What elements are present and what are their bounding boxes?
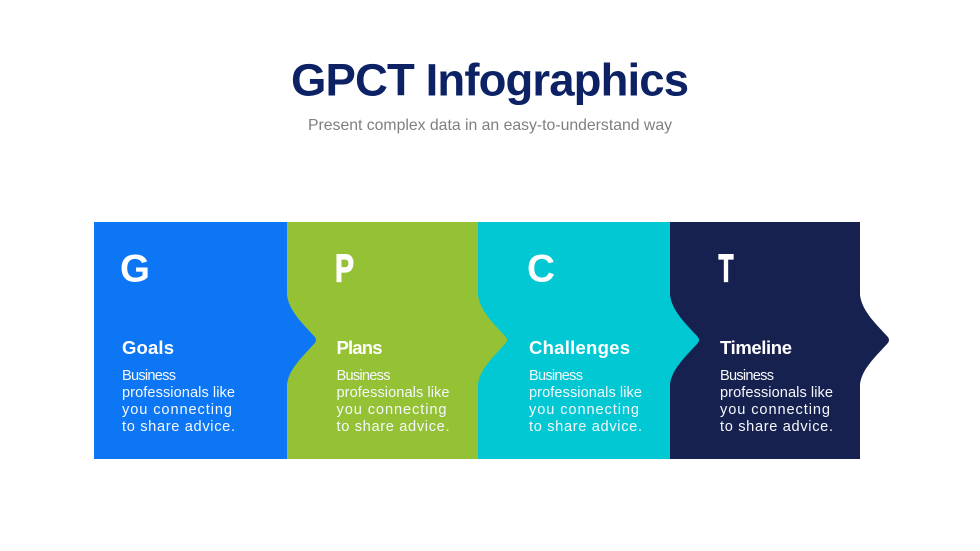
heading: plans: Plans bbox=[336, 337, 382, 358]
plans description: professionals like bbox=[336, 385, 450, 401]
challenges description: to share advice. bbox=[529, 419, 642, 435]
challenges description: you connecting bbox=[529, 402, 639, 418]
heading: timeline: Timeline bbox=[720, 337, 792, 358]
heading: challenges: Challenges bbox=[529, 337, 630, 358]
timeline description: professionals like bbox=[720, 385, 833, 401]
plans description: Business bbox=[336, 368, 390, 384]
heading: goals: Goals bbox=[122, 337, 174, 358]
panel: plans bbox=[287, 222, 507, 459]
challenges description: Business bbox=[529, 368, 583, 384]
goals description bbox=[122, 368, 235, 435]
letter G: G bbox=[120, 248, 150, 290]
title: GPCT Infographics bbox=[291, 54, 689, 106]
timeline description bbox=[720, 368, 833, 435]
goals description: to share advice. bbox=[122, 419, 235, 435]
letter T: T bbox=[718, 248, 734, 290]
plans description bbox=[336, 368, 450, 435]
goals description: Business bbox=[122, 368, 176, 384]
panel: goals bbox=[94, 222, 316, 459]
panel: challenges bbox=[478, 222, 699, 459]
timeline description: you connecting bbox=[720, 402, 830, 418]
subtitle: Present complex data in an easy-to-understand way bbox=[308, 117, 672, 134]
timeline description: Business bbox=[720, 368, 774, 384]
letter P: P bbox=[335, 248, 354, 290]
plans description: to share advice. bbox=[336, 419, 450, 435]
challenges description bbox=[529, 368, 642, 435]
challenges description: professionals like bbox=[529, 385, 642, 401]
letter C: C bbox=[527, 248, 555, 290]
goals description: you connecting bbox=[122, 402, 232, 418]
goals description: professionals like bbox=[122, 385, 235, 401]
timeline description: to share advice. bbox=[720, 419, 833, 435]
challenges shape bbox=[478, 222, 699, 459]
panel: timeline bbox=[670, 222, 889, 459]
timeline shape bbox=[670, 222, 889, 459]
plans description: you connecting bbox=[336, 402, 446, 418]
plans shape bbox=[287, 222, 507, 459]
goals shape bbox=[94, 222, 316, 459]
